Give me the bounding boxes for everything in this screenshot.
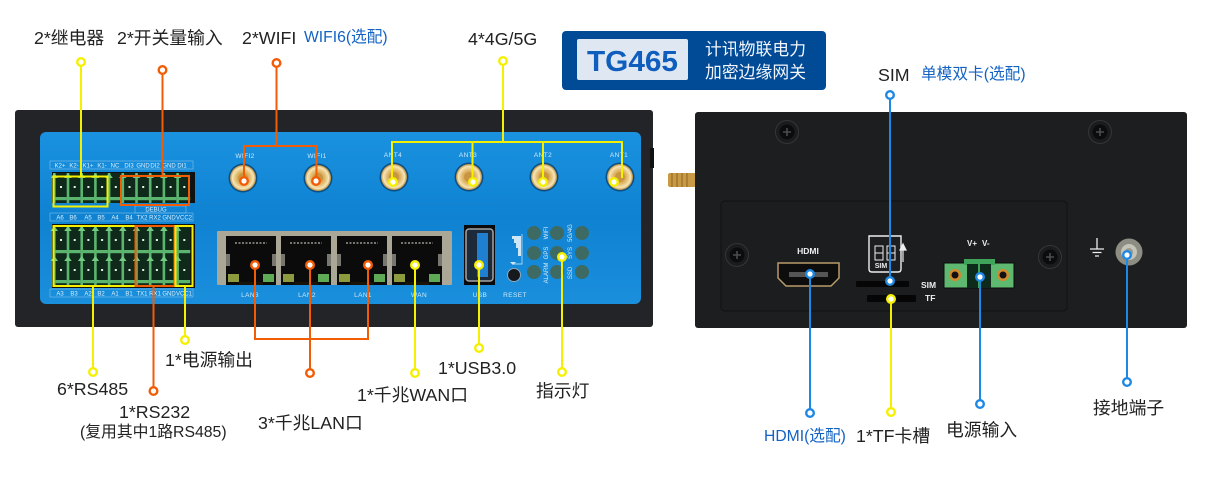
indicator lights: ALARM: [544, 263, 550, 283]
top terminal labels: [50, 161, 193, 170]
badge: TG465: TG465: [587, 46, 678, 78]
chassis: rear: [695, 112, 1187, 328]
labels: top: 2*WIFI: [242, 28, 296, 48]
indicator lights: [527, 224, 589, 283]
antenna connectors: ANT3: [459, 152, 477, 159]
indicator lights: 5G/4G: [568, 224, 574, 242]
top terminal labels: GND: [162, 164, 176, 170]
wifi line: [240, 59, 320, 185]
labels: bottom: 1*USB3.0: [438, 358, 516, 378]
middle terminal labels: A6: [56, 216, 64, 222]
panel: front device: [15, 110, 654, 327]
bottom terminal labels: A1: [111, 292, 119, 298]
reset button: RESET: [503, 292, 527, 299]
inner plate: [721, 201, 1067, 311]
TF line: [887, 295, 895, 416]
antenna connectors: ANT2: [534, 152, 552, 159]
SIM line: [886, 91, 894, 285]
labels: top: 2*继电器: [34, 28, 104, 48]
labels: bottom: 1*千兆WAN口: [357, 385, 468, 405]
labels: bottom: 指示灯: [536, 381, 590, 401]
middle terminal labels: VCC2: [176, 216, 193, 222]
top terminal labels: NC: [111, 164, 120, 170]
antenna stub: [668, 173, 696, 187]
indicator line: [558, 253, 566, 376]
HDMI line: [806, 270, 814, 417]
labels: bottom: 3*千兆LAN口: [258, 413, 363, 433]
bottom terminal labels: GND: [162, 292, 176, 298]
bottom terminal labels: A3: [56, 292, 64, 298]
usb port: [464, 225, 495, 299]
middle terminal labels: B4: [125, 216, 133, 222]
bottom terminal labels: A2: [84, 292, 92, 298]
sim slot: SIM: [921, 280, 936, 290]
RS485 line: [54, 226, 135, 376]
relay line: [54, 58, 108, 207]
LAN line: [251, 261, 372, 377]
badge: TG465: [562, 31, 826, 90]
antenna connectors: ANT1: [610, 152, 628, 159]
indicator lights: SSD: [568, 266, 574, 279]
bottom terminal labels: [50, 289, 193, 298]
callout lines: rear: [806, 91, 1131, 417]
antenna connectors: ANT4: [384, 152, 402, 159]
labels: top: WIFI6(选配): [304, 28, 388, 46]
top terminal labels: DI1: [177, 164, 187, 170]
badge: TG465: 计讯物联电力: [705, 40, 806, 59]
screws: [726, 120, 1112, 268]
top terminal labels: K1-: [97, 164, 107, 170]
tf slot: [867, 293, 935, 303]
bottom terminal labels: TX1: [136, 292, 148, 298]
ethernet ports: [217, 231, 452, 299]
bottom terminal labels: VCC1: [176, 292, 193, 298]
indicator lights: WIFI: [544, 226, 550, 239]
sim slot: [856, 280, 936, 290]
hdmi port: HDMI: [797, 246, 819, 256]
tf slot: TF: [925, 293, 935, 303]
ethernet ports: LAN1: [354, 292, 372, 299]
debug label: DEBUG: [145, 208, 167, 214]
lower terminal block: [50, 224, 195, 288]
indicator lights: SYS: [568, 247, 574, 259]
ground stud: [1116, 238, 1142, 266]
middle terminal labels: RX2: [149, 216, 161, 222]
labels: top: 4*4G/5G: [468, 29, 537, 49]
hdmi port: [778, 246, 839, 286]
top terminal labels: GND: [136, 164, 150, 170]
labels: bottom: 1*TF卡槽: [856, 426, 930, 446]
callout lines: front: [54, 57, 622, 395]
ground line: [1123, 251, 1131, 386]
WAN line: [411, 261, 419, 377]
bottom terminal labels: B1: [125, 292, 133, 298]
middle terminal labels: [50, 213, 193, 222]
antenna connectors: WIFI2: [235, 153, 255, 160]
blue faceplate: [40, 132, 641, 304]
top terminal labels: K2+: [55, 164, 66, 170]
power terminal: [944, 239, 1014, 288]
sim icon: SIM: [875, 263, 887, 270]
labels: bottom: 1*RS232: [119, 402, 190, 422]
power terminal: V+: [967, 239, 977, 248]
antenna connectors: WIFI1: [307, 153, 327, 160]
middle terminal labels: A5: [84, 216, 92, 222]
middle terminal labels: A4: [111, 216, 119, 222]
labels: bottom: HDMI(选配): [764, 427, 846, 445]
labels: bottom: 1*电源输出: [165, 350, 253, 370]
power out line: [176, 226, 192, 344]
top terminal labels: DI3: [124, 164, 134, 170]
switch input line: [121, 66, 189, 205]
top terminal labels: K2-: [69, 164, 79, 170]
USB line: [475, 261, 483, 352]
usb port: USB: [473, 292, 487, 299]
bottom terminal labels: B3: [70, 292, 78, 298]
power terminal: V-: [982, 239, 990, 248]
debug label: [135, 206, 186, 214]
middle terminal labels: B5: [97, 216, 105, 222]
panel: rear device: [668, 112, 1187, 328]
signal icon: [510, 234, 522, 265]
middle terminal labels: B6: [69, 216, 77, 222]
labels: bottom: (复用其中1路RS485): [80, 423, 227, 441]
labels: bottom: 电源输入: [946, 420, 1017, 440]
4G/5G line: [389, 57, 622, 186]
top terminal block: [50, 172, 195, 203]
sim icon: [869, 236, 906, 272]
ethernet ports: LAN3: [241, 292, 259, 299]
power input line: [976, 273, 984, 408]
middle terminal labels: GND: [162, 216, 176, 222]
ethernet ports: WAN: [411, 292, 427, 299]
top terminal labels: DI2: [150, 164, 160, 170]
indicator lights: GPS: [544, 247, 550, 259]
bottom terminal labels: B2: [97, 292, 105, 298]
top terminal labels: K1+: [83, 164, 94, 170]
RS232 line: [136, 226, 174, 395]
labels: top: [34, 28, 1026, 85]
labels: bottom: [57, 350, 1164, 446]
labels: top: 单模双卡(选配): [921, 65, 1026, 83]
labels: bottom: 接地端子: [1093, 398, 1164, 418]
labels: top: 2*开关量输入: [117, 28, 223, 48]
side bump: [650, 148, 654, 168]
antenna connectors: [228, 152, 634, 192]
ethernet ports: LAN2: [298, 292, 316, 299]
middle terminal labels: TX2: [136, 216, 148, 222]
labels: top: SIM: [878, 65, 910, 85]
labels: bottom: 6*RS485: [57, 379, 128, 399]
badge: TG465: 加密边缘网关: [705, 63, 806, 82]
chassis: front: [15, 110, 653, 327]
reset button: [503, 268, 527, 299]
bottom terminal labels: RX1: [149, 292, 161, 298]
ground symbol: [1090, 238, 1104, 256]
